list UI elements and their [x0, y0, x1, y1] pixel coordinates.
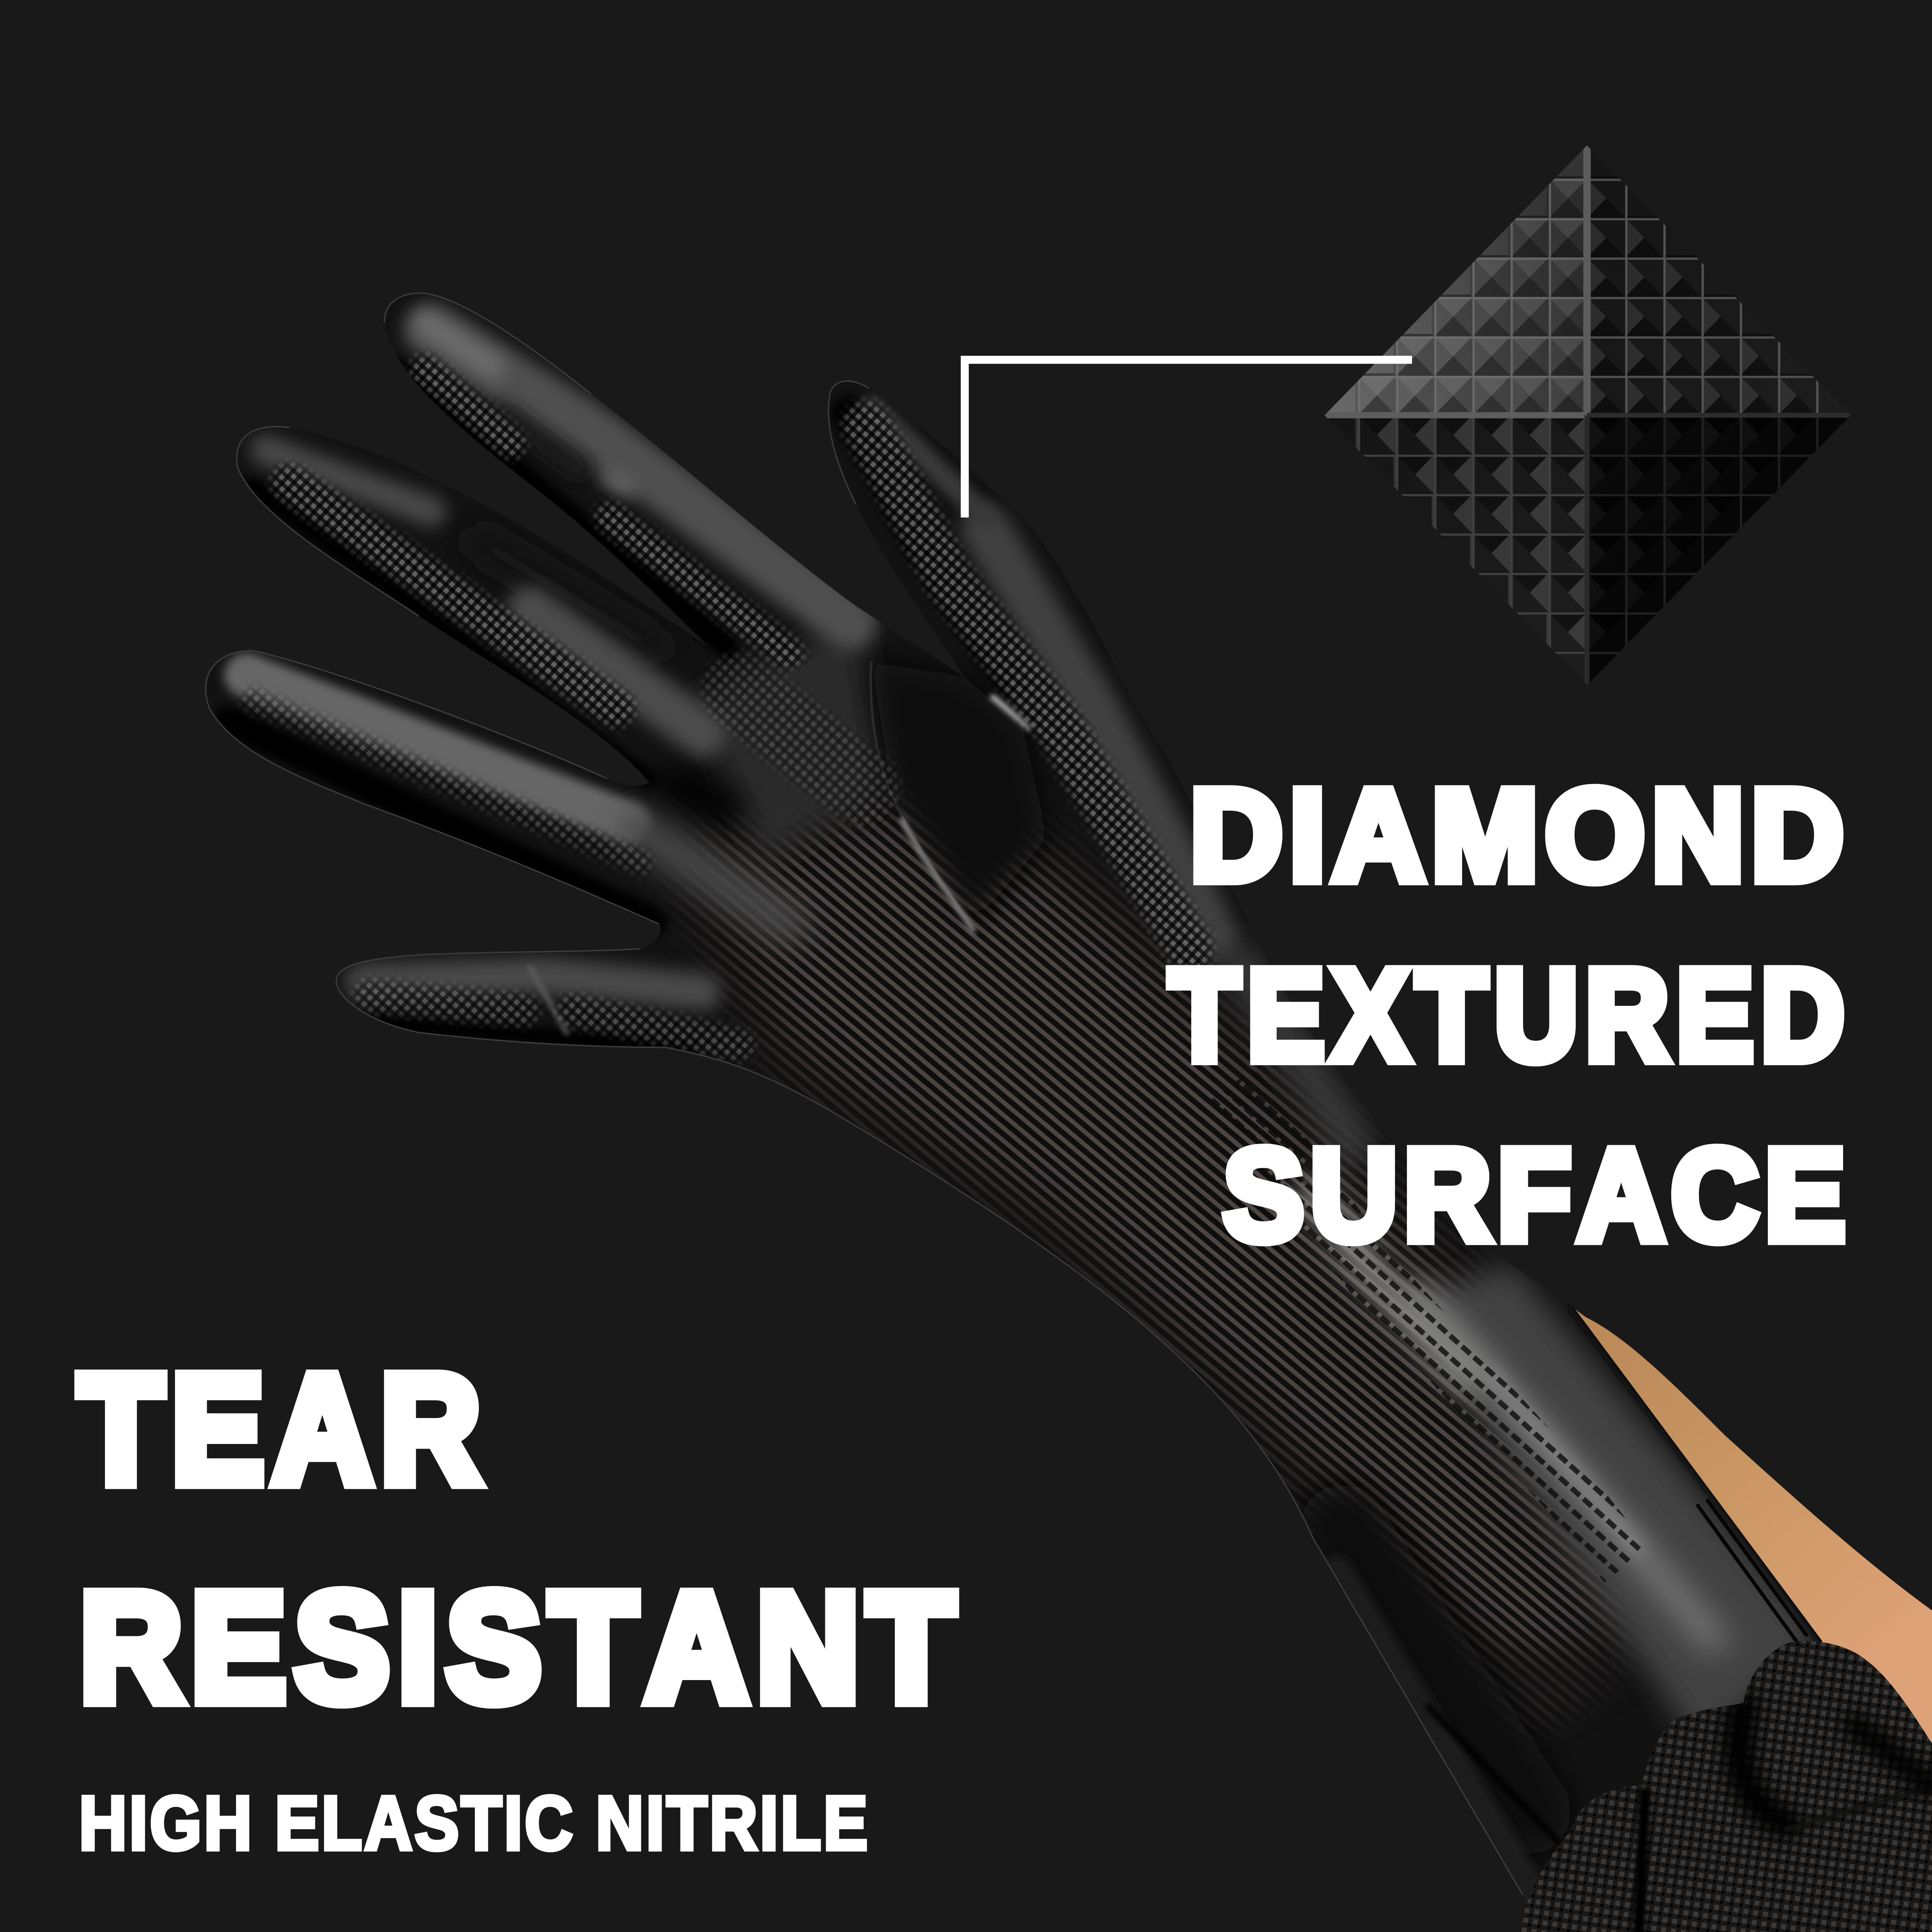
forearm shadow side [1343, 1528, 1528, 1811]
subheading: high elastic nitrile: HIGH ELASTIC NITRILE [79, 1780, 870, 1866]
callout leader line [965, 360, 1412, 517]
swatch quadrant: bottom right [1587, 415, 1851, 685]
thenar shadow and crease [871, 662, 1047, 924]
swatch quadrant: top right [1587, 145, 1851, 415]
third finger [247, 675, 628, 823]
right finger shadow strip [848, 413, 1008, 680]
heading: diamond textured surface: TEXTURED [1169, 942, 1852, 1087]
glove outline [206, 293, 1523, 1895]
heading: tear resistant: RESISTANT [80, 1561, 964, 1733]
top finger [397, 370, 727, 647]
back of hand smooth side [986, 530, 1214, 936]
dashed highlight row on the forearm [1306, 1183, 1479, 1386]
photo: exposed forearm skin [1562, 1300, 1932, 1762]
heading: diamond textured surface [1169, 763, 1852, 1267]
swatch quadrant: top left [1325, 145, 1587, 415]
cuff plain band [1405, 1263, 1822, 1750]
thumb [364, 976, 702, 992]
heading: tear resistant: TEAR [79, 1343, 489, 1515]
heading: tear resistant [79, 1343, 964, 1733]
cuff rolled edge ridges [1575, 1308, 1822, 1641]
swatch quadrant: bottom left [1325, 415, 1587, 685]
palm and forearm ribbed texture [684, 795, 1624, 1726]
icon: diamond texture swatch [1281, 123, 1893, 707]
photo: black diamond-textured glove on raised hand and forearm [205, 293, 1822, 1895]
cuff lower band [1337, 1571, 1534, 1895]
photo: second gloved hand gripping the cuff [1515, 1639, 1932, 1932]
upper palm tone [690, 616, 887, 862]
palm knuckle shadow [672, 782, 727, 807]
heading: diamond textured surface: SURFACE [1223, 1122, 1852, 1267]
heading: diamond textured surface: DIAMOND [1190, 763, 1851, 907]
second finger [253, 487, 647, 779]
